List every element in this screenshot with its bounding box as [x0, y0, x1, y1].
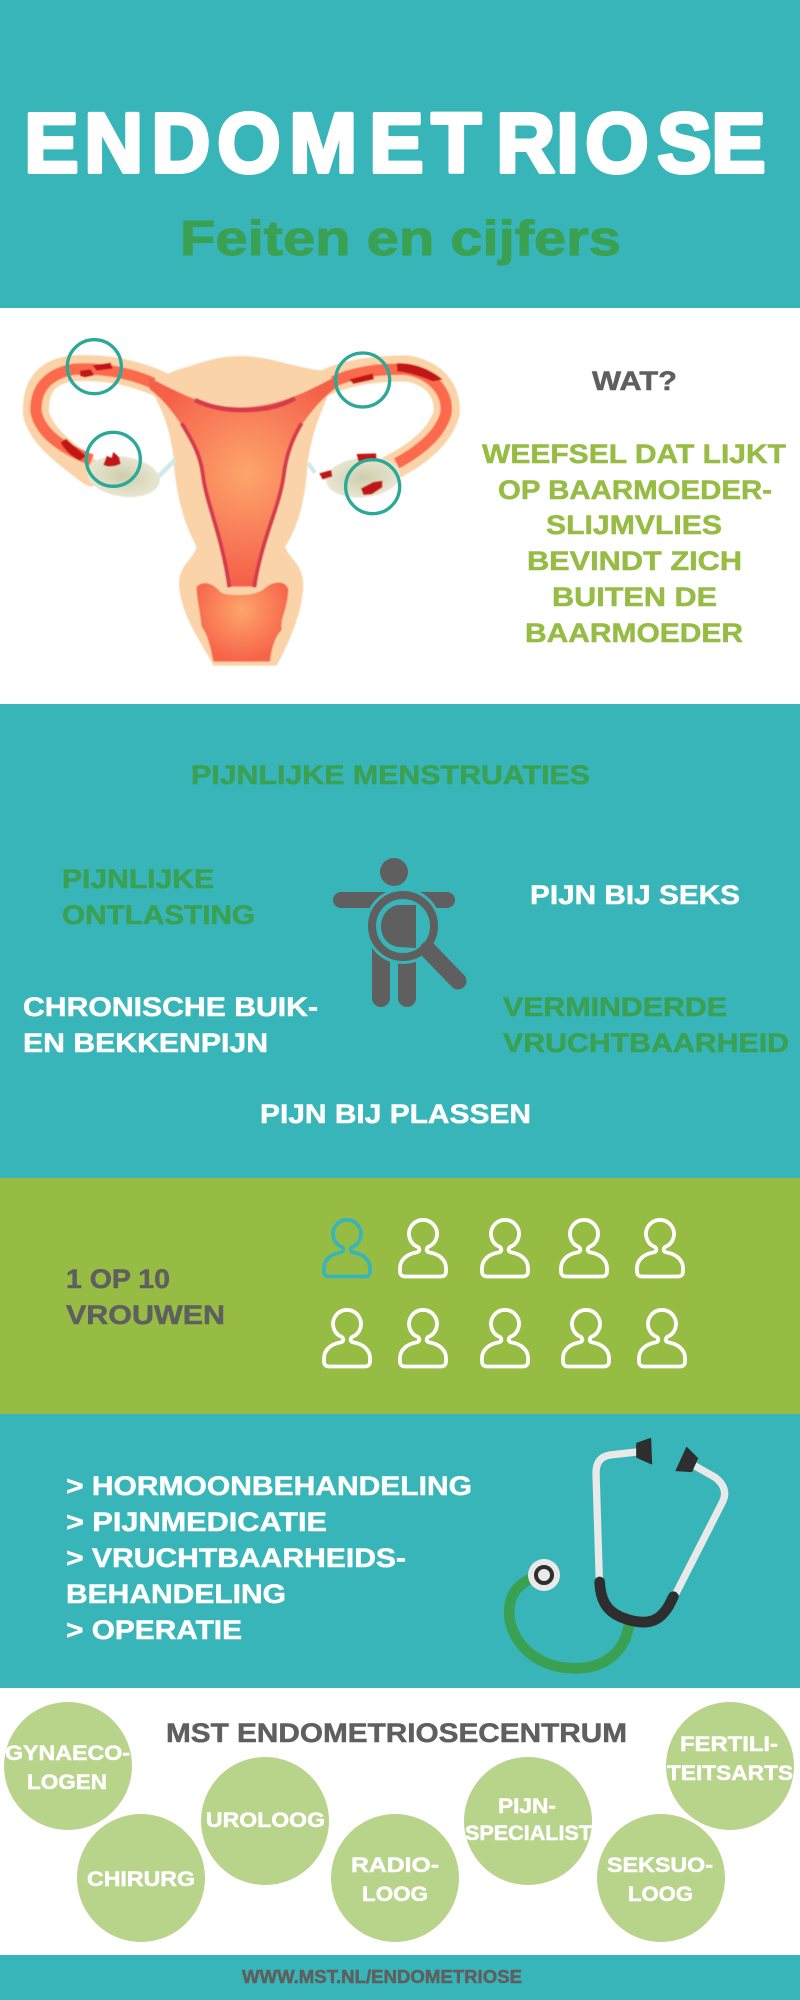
description text: BUITEN DE: [552, 582, 717, 612]
highlight rings: [67, 340, 400, 514]
panel: 1 op 10 vrouwen: [0, 1178, 800, 1414]
treatment list: > PIJNMEDICATIE: [66, 1507, 327, 1537]
heading: MST ENDOMETRIOSECENTRUM: [166, 1718, 627, 1748]
description text: SLIJMVLIES: [546, 510, 722, 540]
circle: chirurg: [77, 1814, 205, 1942]
circle: pijnspecialist: [464, 1757, 592, 1885]
circle: pijnspecialist: PIJN-: [498, 1795, 556, 1818]
panel: mst endometriosecentrum: [0, 1688, 800, 1955]
symptom: chronische buik- en bekkenpijn: [23, 992, 318, 1058]
symptom: chronische buik- en bekkenpijn: CHRONISCHE BUIK-: [23, 992, 318, 1022]
symptom: pijn bij plassen: PIJN BIJ PLASSEN: [260, 1099, 531, 1129]
symptom: chronische buik- en bekkenpijn: EN BEKKENPIJN: [23, 1028, 268, 1058]
description text: WEEFSEL DAT LIJKT: [482, 439, 787, 469]
symptom: pijnlijke ontlasting: ONTLASTING: [62, 900, 255, 930]
circle: gynaecologen: LOGEN: [27, 1771, 107, 1794]
treatment list: [66, 1471, 472, 1645]
circle: fertiliteitsarts: FERTILI-: [680, 1733, 778, 1756]
treatment list: > VRUCHTBAARHEIDS-: [66, 1543, 406, 1573]
circle: radioloog: LOOG: [362, 1883, 428, 1906]
treatment list: > OPERATIE: [66, 1615, 242, 1645]
panel: behandeling: [0, 1414, 800, 1688]
circle: seksuoloog: LOOG: [628, 1883, 693, 1906]
statistic text: 1 OP 10: [66, 1264, 170, 1294]
symptom: pijnlijke menstruaties: PIJNLIJKE MENSTRUATIES: [191, 760, 590, 790]
symptom: pijnlijke ontlasting: PIJNLIJKE: [62, 864, 214, 894]
icon: stethoscope: [509, 1438, 725, 1668]
circle: chirurg: CHIRURG: [87, 1868, 195, 1891]
panel: wat is endometriose: [0, 308, 800, 704]
description text: OP BAARMOEDER-: [498, 475, 772, 505]
symptom: verminderde vruchtbaarheid: VRUCHTBAARHEID: [503, 1028, 789, 1058]
description text: [482, 439, 787, 648]
illustration: uterus with lesions: [36, 340, 447, 666]
circle: pijnspecialist: SPECIALIST: [465, 1822, 592, 1845]
label: wat: WAT?: [592, 366, 677, 396]
circle: fertiliteitsarts: [666, 1702, 794, 1830]
panel: symptomen: [0, 704, 800, 1178]
circle: seksuoloog: [597, 1814, 725, 1942]
description text: BAARMOEDER: [525, 618, 743, 648]
symptom: pijn bij seks: PIJN BIJ SEKS: [530, 880, 740, 910]
icon: body with magnifying glass: [333, 858, 458, 1007]
treatment list: BEHANDELING: [66, 1579, 286, 1609]
symptom: verminderde vruchtbaarheid: VERMINDERDE: [503, 992, 727, 1022]
circle: gynaecologen: GYNAECO-: [5, 1742, 130, 1765]
panel: header: [0, 0, 800, 308]
circle: radioloog: RADIO-: [351, 1854, 439, 1877]
circle: radioloog: [331, 1814, 459, 1942]
symptom: verminderde vruchtbaarheid: [503, 992, 789, 1058]
statistic text: [66, 1264, 225, 1330]
icon row: ten women, one highlighted: [324, 1220, 685, 1366]
statistic text: VROUWEN: [66, 1300, 225, 1330]
circle: uroloog: [201, 1757, 329, 1885]
circle: gynaecologen: [4, 1702, 132, 1830]
website link: WWW.MST.NL/ENDOMETRIOSE: [242, 1967, 522, 1987]
circle: fertiliteitsarts: TEITSARTS: [667, 1762, 793, 1785]
treatment list: > HORMOONBEHANDELING: [66, 1471, 472, 1501]
circle: seksuoloog: SEKSUO-: [607, 1854, 713, 1877]
symptom: pijnlijke ontlasting: [62, 864, 255, 930]
circle: uroloog: UROLOOG: [206, 1809, 325, 1832]
subtitle: Feiten en cijfers: [180, 212, 621, 266]
title: ENDOMETRIOSE: [24, 96, 766, 190]
panel: footer: [0, 1955, 800, 2000]
description text: BEVINDT ZICH: [527, 546, 742, 576]
